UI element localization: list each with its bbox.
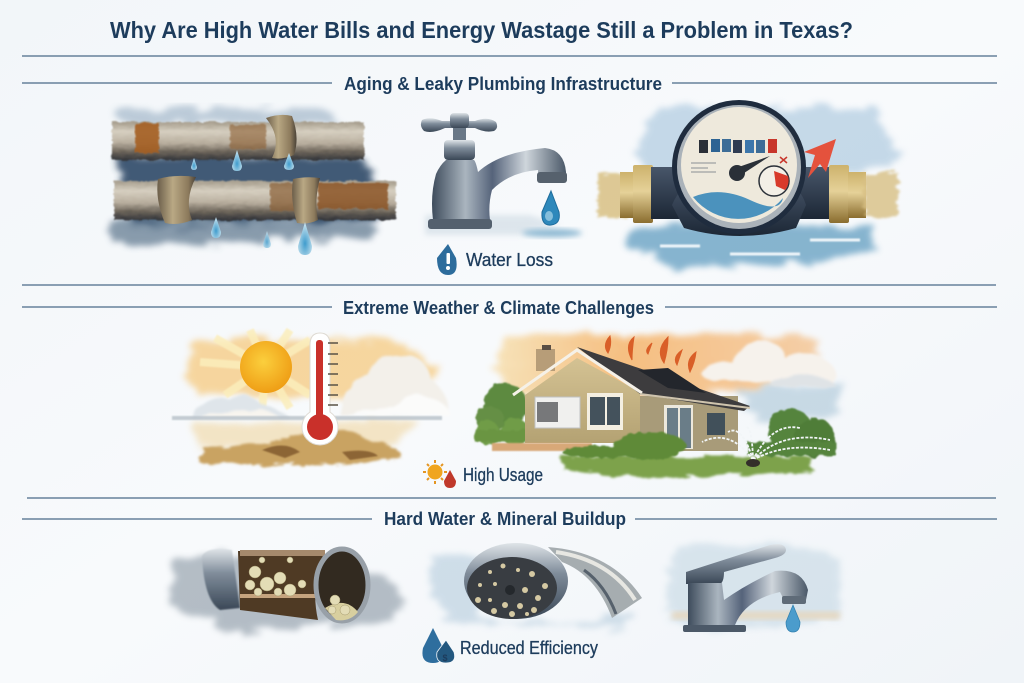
illustration: dripping mixer tap bbox=[665, 544, 842, 632]
label: water loss bbox=[437, 244, 553, 275]
icon: water drop with exclamation bbox=[437, 244, 457, 275]
illustration: clogged shower head bbox=[428, 543, 642, 628]
icon: two water drops with dollar sign bbox=[422, 628, 455, 663]
label: high usage bbox=[423, 460, 543, 488]
illustration: sun, thermometer and desert bbox=[172, 330, 450, 466]
section 2: extreme weather and climate challenges bbox=[22, 298, 997, 488]
title: Why Are High Water Bills and Energy Wastage Still a Problem in Texas? bbox=[110, 17, 853, 43]
illustration: pipe with mineral scale bbox=[170, 549, 408, 632]
label: water loss: Water Loss bbox=[466, 250, 553, 270]
icon: two water drops with dollar sign: $ bbox=[442, 653, 448, 663]
illustration: rusty leaking pipes bbox=[105, 108, 396, 255]
heading: aging and leaky plumbing: Aging & Leaky Plumbing Infrastructure bbox=[344, 74, 662, 94]
label: high usage: High Usage bbox=[463, 465, 543, 485]
label: reduced efficiency: Reduced Efficiency bbox=[460, 638, 598, 658]
illustration: house with AC and sprinkler bbox=[475, 335, 842, 478]
heading: hard water: Hard Water & Mineral Buildup bbox=[384, 509, 626, 529]
section 3: hard water and mineral buildup bbox=[22, 509, 997, 663]
icon: sun and red drop bbox=[423, 460, 456, 488]
heading: extreme weather: Extreme Weather & Climate Challenges bbox=[343, 298, 654, 318]
section 1: aging and leaky plumbing infrastructure bbox=[22, 74, 997, 275]
illustration: dripping faucet bbox=[421, 113, 582, 237]
illustration: water meter bbox=[598, 100, 900, 266]
label: reduced efficiency bbox=[422, 628, 598, 663]
